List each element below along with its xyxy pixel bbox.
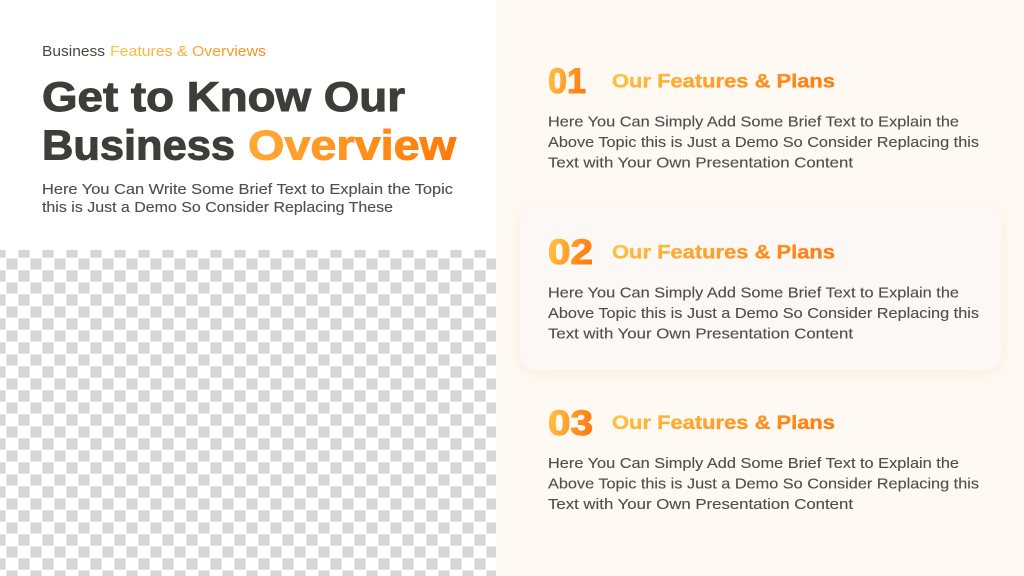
- panel: highlighted feature card: [520, 206, 1001, 370]
- feature 03: [548, 404, 979, 513]
- eyebrow heading: Business: [42, 44, 105, 60]
- feature 02 text: [548, 286, 979, 342]
- title: [42, 73, 456, 168]
- number 03: 03: [548, 404, 593, 443]
- feature 01: [548, 62, 979, 172]
- title: Overview: [248, 122, 456, 168]
- intro text: [42, 182, 453, 216]
- feature 02 text: Text with Your Own Presentation Content: [548, 326, 853, 342]
- eyebrow heading: [42, 44, 266, 60]
- feature 01 text: [548, 114, 979, 172]
- feature 01 text: Above Topic this is Just a Demo So Consider Replacing this: [548, 135, 979, 151]
- number 01: 01: [548, 62, 586, 101]
- feature 02 text: Here You Can Simply Add Some Brief Text to Explain the: [548, 286, 959, 302]
- feature 03 heading: Our Features & Plans: [612, 413, 835, 434]
- intro text: this is Just a Demo So Consider Replacing These: [42, 200, 393, 216]
- feature 02 text: Above Topic this is Just a Demo So Consider Replacing this: [548, 306, 979, 322]
- feature 01 text: Here You Can Simply Add Some Brief Text to Explain the: [548, 114, 959, 130]
- panel: right background: [496, 0, 1024, 576]
- feature 03 text: Text with Your Own Presentation Content: [548, 497, 853, 513]
- feature 01 heading: Our Features & Plans: [612, 72, 835, 92]
- eyebrow heading: Features & Overviews: [110, 44, 266, 60]
- feature 03 text: Above Topic this is Just a Demo So Consider Replacing this: [548, 476, 979, 492]
- title: Business: [42, 122, 235, 168]
- feature 03 text: Here You Can Simply Add Some Brief Text to Explain the: [548, 456, 959, 472]
- number 02: 02: [548, 233, 593, 272]
- feature 01 text: Text with Your Own Presentation Content: [548, 156, 853, 172]
- feature 03 text: [548, 456, 979, 513]
- intro text: Here You Can Write Some Brief Text to Explain the Topic: [42, 182, 453, 198]
- title: Get to Know Our: [42, 73, 405, 120]
- image placeholder checkerboard: [0, 250, 496, 576]
- feature 02: [548, 233, 979, 342]
- feature 02 heading: Our Features & Plans: [612, 242, 835, 264]
